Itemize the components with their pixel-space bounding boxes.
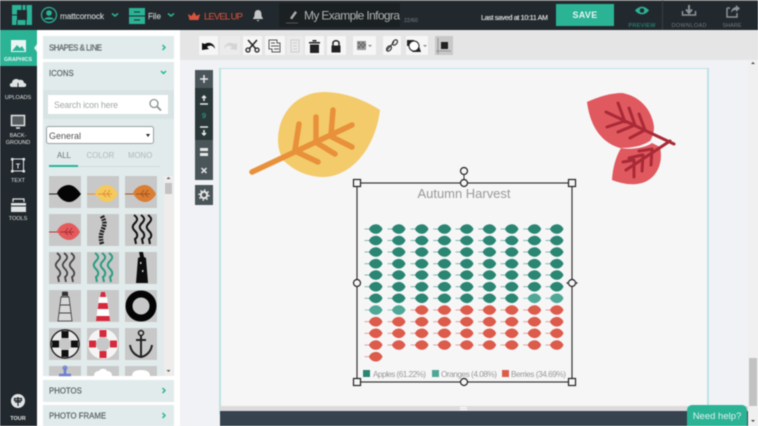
oranges [364, 294, 564, 315]
icon: copy [269, 40, 280, 52]
nav: uploads: UPLOADS [5, 95, 31, 101]
level up: LEVEL UP [204, 12, 243, 22]
preview [628, 7, 656, 29]
save button: SAVE [572, 10, 598, 20]
user menu: mattcornock [60, 11, 105, 21]
legend: Berries (34.69%) [511, 370, 566, 379]
nav: graphics: GRAPHICS [4, 57, 32, 63]
top bar [0, 0, 758, 30]
nav: background: GROUND [6, 140, 30, 146]
icon: mask [407, 40, 421, 52]
accordion: photo frame: PHOTO FRAME [49, 412, 106, 420]
icon: redo [224, 43, 237, 50]
thumbnail rings [51, 294, 153, 358]
icon: link [387, 42, 394, 50]
category select [46, 126, 154, 144]
chart title: Autumn Harvest [418, 186, 511, 201]
icon: lock [333, 41, 339, 46]
share: SHARE [722, 23, 742, 29]
accordion: icons [43, 62, 174, 376]
top editing toolbar [180, 30, 758, 68]
berries [364, 305, 564, 362]
nav: background: BACK- [10, 133, 27, 139]
nav: text [11, 158, 26, 184]
pictogram chart [364, 224, 564, 362]
share [722, 5, 742, 29]
download [672, 5, 707, 29]
apples [364, 224, 564, 303]
icon: bring forward [200, 96, 208, 104]
last saved: Last saved at 10:11 AM [481, 13, 548, 22]
nav: tools: TOOLS [9, 216, 28, 222]
accordion: photos: PHOTOS [49, 386, 82, 396]
legend [363, 370, 566, 379]
nav: tour: TOUR [10, 416, 26, 422]
legend: Apples (61.22%) [373, 370, 426, 379]
icon: delete [202, 168, 206, 173]
icon: layers [200, 148, 208, 156]
nav: background [6, 116, 30, 146]
tabs: MONO [128, 151, 152, 160]
category select: General [49, 131, 81, 141]
tabs: ALL [57, 151, 72, 160]
nav: tour [10, 394, 26, 422]
icon: pattern [357, 41, 372, 50]
layer number: 9 [202, 111, 206, 120]
icon: scissors [248, 40, 257, 49]
icon: align [436, 38, 451, 54]
accordion: icons: ICONS [49, 69, 74, 78]
thumbnail vine and waves [56, 215, 151, 282]
icon: undo [202, 43, 215, 50]
accordion: photos [43, 380, 174, 402]
thumbnail leaves [49, 185, 156, 240]
left navigation rail [0, 30, 37, 426]
icon: red leaves [587, 93, 674, 184]
infographic: Autumn Harvest [363, 186, 566, 379]
nav: text: T [16, 164, 21, 170]
selection box with handles [354, 168, 578, 386]
right scrollbar [748, 60, 758, 426]
tabs: COLOR [86, 151, 115, 160]
need help button [687, 405, 747, 426]
nav: uploads [5, 79, 31, 101]
search box: Search icon here [54, 100, 118, 110]
icon: trash [309, 40, 320, 53]
need help button: Need help? [693, 411, 741, 422]
save button [556, 4, 614, 26]
canvas page [220, 68, 748, 426]
icon thumbnails [49, 176, 157, 376]
icon: bell [253, 10, 263, 22]
user menu [42, 8, 118, 22]
accordion: shapes and line: SHAPES & LINE [49, 44, 102, 52]
document title [279, 3, 400, 27]
download: DOWNLOAD [672, 23, 707, 29]
tabs [49, 151, 160, 167]
search box [48, 95, 168, 114]
icon: paste [291, 40, 299, 52]
panel scrollbar [164, 176, 173, 376]
preview: PREVIEW [628, 23, 656, 29]
thumbnail lighthouses [58, 252, 148, 321]
vertical layer tools [195, 70, 213, 205]
icon: settings gear [199, 190, 209, 200]
nav: text: TEXT [11, 178, 26, 184]
accordion: shapes and line [43, 36, 174, 59]
logo [12, 5, 32, 25]
document title: My Example Infogra [304, 8, 400, 22]
file menu [129, 8, 174, 24]
accordion: photo frame [43, 405, 174, 426]
nav: graphics [0, 30, 37, 66]
file menu: File [148, 12, 161, 21]
legend: Oranges (4.08%) [441, 370, 497, 379]
thumbnail partial row [59, 366, 150, 376]
icon: yellow leaf [252, 92, 380, 177]
icon: add [200, 75, 208, 83]
nav: tools [9, 199, 28, 222]
sidebar panel [37, 30, 180, 426]
icon: send backward [200, 127, 208, 135]
character count: 22/60 [404, 18, 418, 24]
